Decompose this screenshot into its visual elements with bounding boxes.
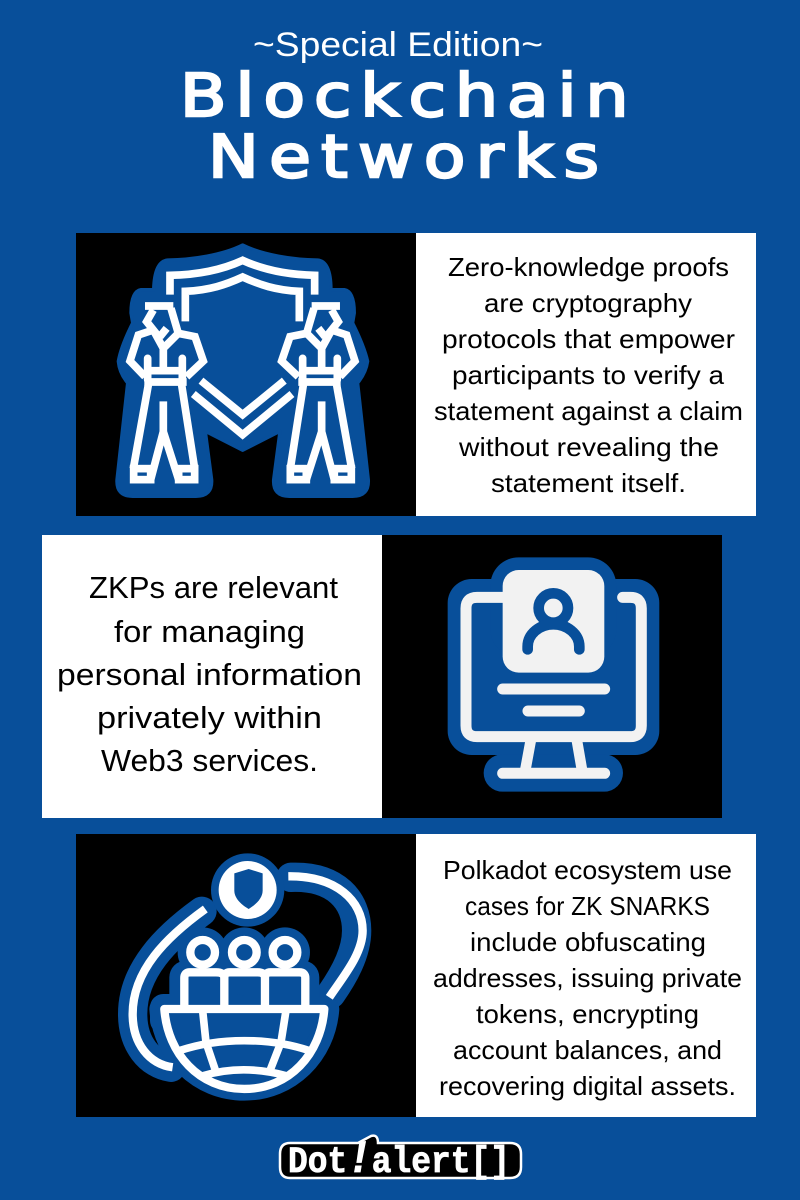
text: polkadot description: Polkadot ecosystem use bbox=[443, 855, 732, 885]
text: polkadot description: tokens, encrypting bbox=[476, 999, 699, 1029]
text: ZKP relevance: ZKPs are relevant bbox=[89, 570, 338, 605]
text: zero-knowledge description: Zero-knowledge proofs bbox=[448, 252, 729, 282]
text: zero-knowledge description: statement itself. bbox=[491, 468, 686, 498]
text: ZKP relevance bbox=[57, 570, 362, 778]
subtitle: ~Special Edition~ bbox=[253, 26, 543, 64]
logo: Dot!alert[]: Dot!alert[] bbox=[288, 1134, 510, 1186]
text: ZKP relevance: personal information bbox=[57, 657, 362, 692]
text: polkadot description: cases for ZK SNARKS bbox=[465, 891, 710, 921]
icon: guards with shield bbox=[117, 245, 368, 496]
title: Blockchain bbox=[180, 61, 628, 130]
text: zero-knowledge description: protocols that empower bbox=[442, 324, 735, 354]
text: polkadot description: addresses, issuing private bbox=[433, 963, 742, 993]
text: ZKP relevance: Web3 services. bbox=[101, 743, 318, 778]
icon: monitor with user profile bbox=[448, 557, 659, 792]
title bbox=[180, 61, 628, 191]
text: ZKP relevance: for managing bbox=[114, 614, 305, 649]
text: polkadot description bbox=[433, 855, 742, 1101]
text: polkadot description: include obfuscating bbox=[470, 927, 706, 957]
text: zero-knowledge description: participants to verify a bbox=[452, 360, 725, 390]
figure: right guard bbox=[282, 306, 355, 480]
title: Networks bbox=[208, 122, 599, 191]
icon: globe with people and shield bbox=[133, 853, 363, 1089]
text: ZKP relevance: privately within bbox=[97, 700, 322, 735]
text: polkadot description: recovering digital assets. bbox=[439, 1071, 736, 1101]
text: polkadot description: account balances, and bbox=[453, 1035, 722, 1065]
text: zero-knowledge description: statement against a claim bbox=[434, 396, 743, 426]
panel: personal information bbox=[42, 535, 722, 818]
panel: polkadot use cases bbox=[76, 834, 756, 1117]
panel: zero-knowledge proofs bbox=[76, 233, 756, 516]
text: zero-knowledge description: are cryptography bbox=[484, 288, 692, 318]
text: zero-knowledge description bbox=[434, 252, 743, 498]
figure: left guard bbox=[130, 306, 203, 480]
text: zero-knowledge description: without revealing the bbox=[458, 432, 719, 462]
